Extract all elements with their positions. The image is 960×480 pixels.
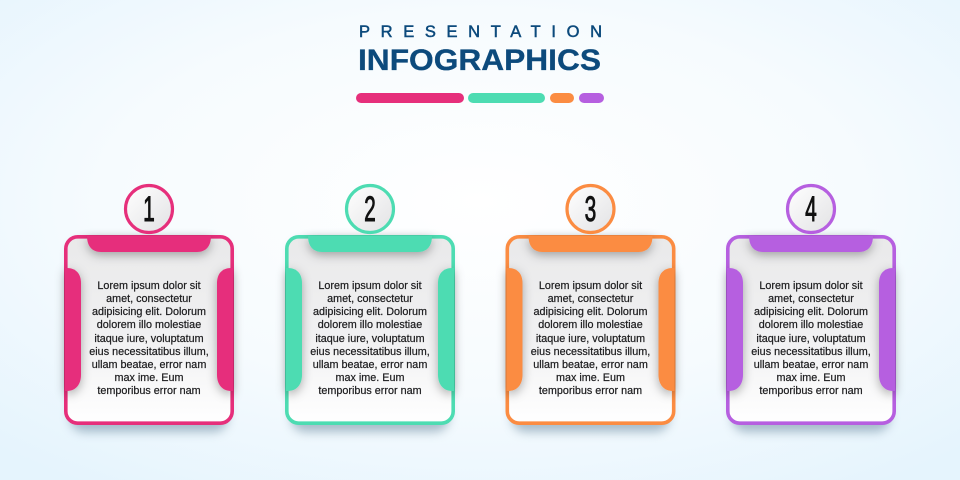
- panel: card 4: adipisicing elit. Dolorum: [754, 306, 868, 318]
- panel: card 3: Lorem ipsum dolor sit: [539, 280, 642, 292]
- panel: card 1: dolorem illo molestiae: [97, 319, 201, 331]
- heading: presentation: PRESENTATION: [359, 23, 602, 41]
- panel: card 3: temporibus error nam: [539, 385, 642, 397]
- panel: card 4: eius necessitatibus illum,: [751, 346, 871, 358]
- panel: card 4: temporibus error nam: [759, 385, 863, 397]
- panel: card 3: ullam beatae, error nam: [533, 359, 648, 371]
- panel: card 4: [727, 186, 895, 432]
- panel: card 2: adipisicing elit. Dolorum: [313, 306, 427, 318]
- panel: card 3: max ime. Eum: [556, 372, 625, 384]
- colour bars: [356, 93, 604, 103]
- panel: card 1: [65, 186, 233, 432]
- panel: card 4: ullam beatae, error nam: [754, 359, 868, 371]
- panel: card 2: Lorem ipsum dolor sit: [318, 280, 422, 292]
- panel: card 4: dolorem illo molestiae: [759, 319, 863, 331]
- panel: card 2: 2: [364, 191, 376, 229]
- panel: card 2: itaque iure, voluptatum: [315, 333, 425, 345]
- panel: card 2: amet, consectetur: [327, 293, 413, 305]
- panel: card 1: 1: [143, 191, 155, 229]
- panel: card 3: dolorem illo molestiae: [538, 319, 643, 331]
- panel: card 4: itaque iure, voluptatum: [756, 333, 866, 345]
- panel: card 1: ullam beatae, error nam: [92, 359, 206, 371]
- panel: card 3: amet, consectetur: [548, 293, 634, 305]
- panel: card 2: eius necessitatibus illum,: [310, 346, 430, 358]
- panel: card 2: ullam beatae, error nam: [313, 359, 427, 371]
- panel: card 2: temporibus error nam: [318, 385, 422, 397]
- panel: card 1: amet, consectetur: [106, 293, 192, 305]
- panel: card 2: [286, 186, 454, 432]
- panel: card 1: Lorem ipsum dolor sit: [97, 280, 201, 292]
- panel: card 3: itaque iure, voluptatum: [536, 333, 645, 345]
- panel: card 4: 4: [805, 191, 817, 229]
- panel: card 2: dolorem illo molestiae: [318, 319, 422, 331]
- panel: card 1: temporibus error nam: [97, 385, 201, 397]
- panel: card 1: eius necessitatibus illum,: [89, 346, 209, 358]
- title: [358, 23, 602, 77]
- heading: infographics: INFOGRAPHICS: [358, 44, 601, 77]
- panel: card 1: max ime. Eum: [114, 372, 184, 384]
- panel: card 3: adipisicing elit. Dolorum: [533, 306, 648, 318]
- panel: card 3: [506, 186, 674, 432]
- panel: card 1: itaque iure, voluptatum: [94, 333, 204, 345]
- panel: card 3: 3: [585, 191, 596, 229]
- panel: card 4: amet, consectetur: [768, 293, 854, 305]
- panel: card 4: Lorem ipsum dolor sit: [759, 280, 863, 292]
- panel: card 1: adipisicing elit. Dolorum: [92, 306, 206, 318]
- panel: card 3: eius necessitatibus illum,: [531, 346, 650, 358]
- panel: card 2: max ime. Eum: [336, 372, 404, 384]
- panel: card 4: max ime. Eum: [776, 372, 846, 384]
